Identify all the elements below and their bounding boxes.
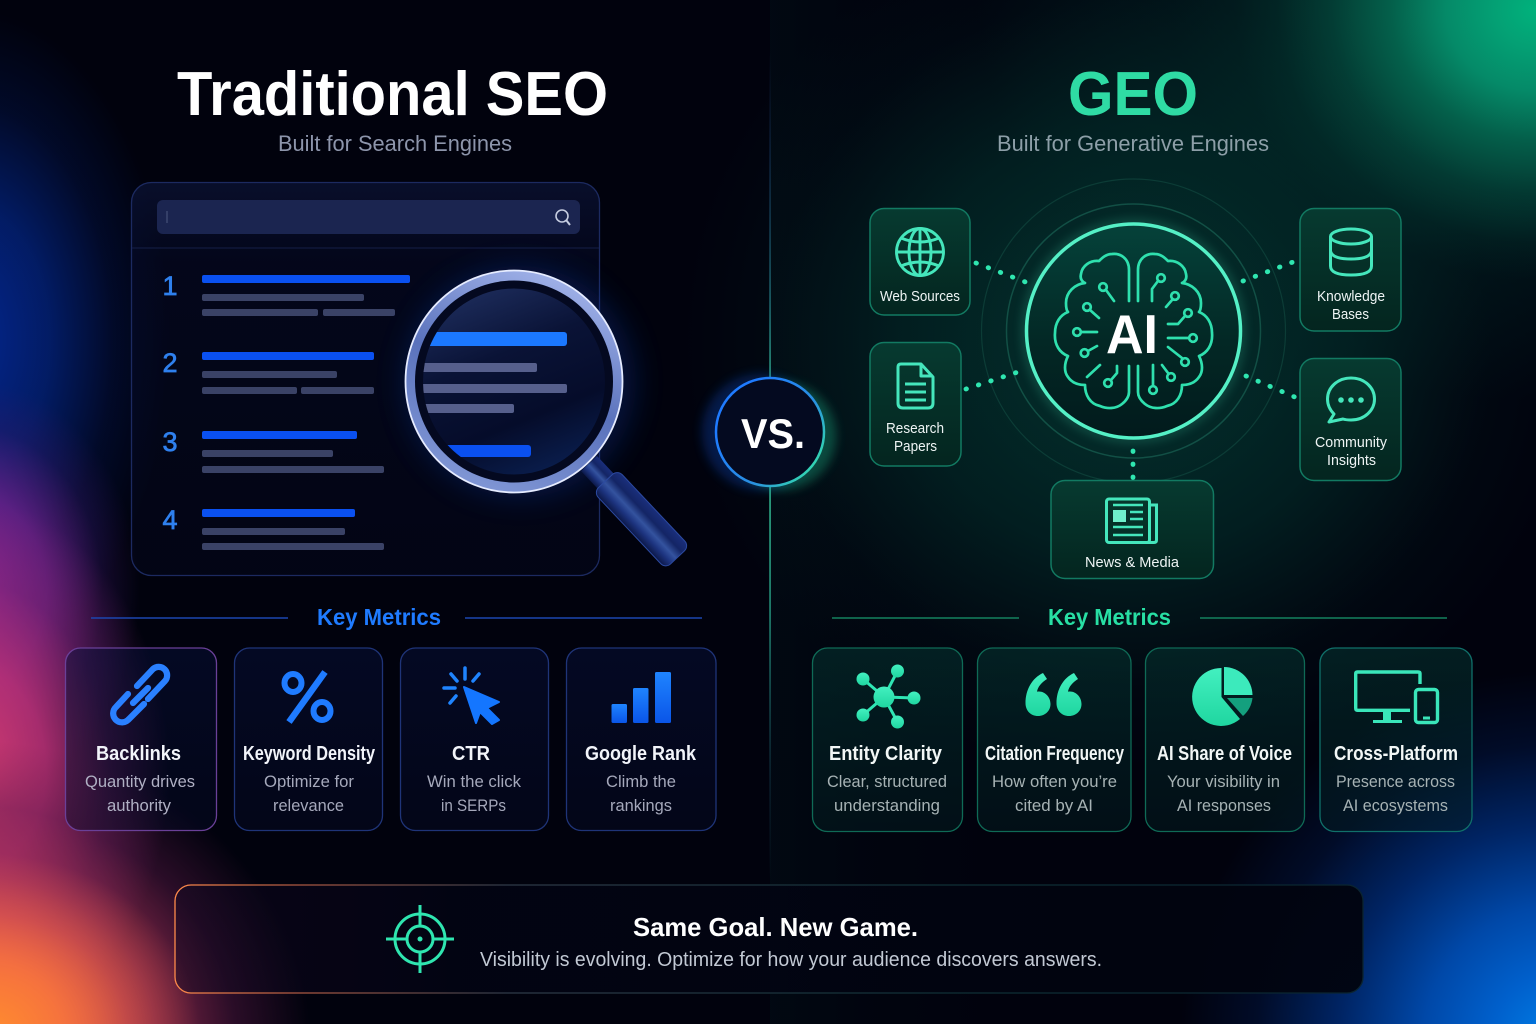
- metric card: CTR: CTR: [452, 743, 491, 765]
- metric card: Entity Clarity: Clear, structured: [827, 772, 947, 791]
- icon: document: [898, 364, 933, 408]
- metric card: Backlinks: authority: [107, 796, 171, 815]
- metric card: Google Rank: rankings: [610, 796, 672, 815]
- metric card: Keyword Density: Keyword Density: [243, 743, 376, 765]
- result 3: [162, 427, 384, 473]
- icon: percent: [284, 672, 330, 722]
- result 1: [162, 271, 410, 316]
- metric card: Cross-Platform: [1320, 648, 1472, 832]
- metric card: Citation Frequency: Citation Frequency: [985, 743, 1125, 765]
- source card: Research Papers: [870, 342, 961, 466]
- metric card: Backlinks: Backlinks: [96, 743, 181, 765]
- right half haze: [770, 0, 1536, 1024]
- metric card: CTR: [400, 648, 548, 830]
- banner heading: Same Goal. New Game.: [633, 912, 918, 942]
- metric card: Entity Clarity: [812, 648, 962, 832]
- metric card: Keyword Density: Optimize for: [264, 772, 354, 791]
- VS badge: [702, 374, 836, 490]
- metric card: Backlinks: Quantity drives: [85, 772, 195, 791]
- icon: chat bubble: [1328, 378, 1374, 422]
- AI hub: [982, 179, 1286, 483]
- metric card: Backlinks: [66, 648, 216, 830]
- AI label: AI: [1106, 303, 1158, 365]
- metric card: AI Share of Voice: AI responses: [1177, 796, 1271, 815]
- source card: Community Insights: [1300, 358, 1401, 480]
- metric card: Google Rank: Climb the: [606, 772, 676, 791]
- subtitle: search engines: Built for Search Engines: [278, 131, 512, 156]
- metric card: CTR: in SERPs: [441, 796, 506, 815]
- icon: target: [386, 905, 454, 973]
- VS badge: VS.: [741, 410, 805, 457]
- source card: Community Insights: Community: [1315, 435, 1388, 451]
- center divider: [769, 50, 771, 880]
- metric card: Entity Clarity: Entity Clarity: [829, 743, 943, 765]
- metric card: Cross-Platform: Cross-Platform: [1334, 743, 1458, 765]
- metric card: CTR: Win the click: [427, 772, 521, 791]
- icon: bar chart: [612, 672, 671, 723]
- metric card: AI Share of Voice: AI Share of Voice: [1157, 743, 1292, 765]
- icon: newspaper: [1106, 499, 1156, 542]
- banner text: Visibility is evolving. Optimize for how your audience discovers answers.: [480, 948, 1102, 971]
- source card: News & Media: [1051, 480, 1214, 578]
- metric card: Citation Frequency: cited by AI: [1015, 796, 1093, 815]
- heading: SEO key metrics: Key Metrics: [317, 604, 441, 630]
- subtitle: generative engines: Built for Generative Engines: [997, 131, 1269, 156]
- metric card: Cross-Platform: AI ecosystems: [1343, 796, 1448, 815]
- icon: entity network: [856, 664, 920, 728]
- metric card: AI Share of Voice: Your visibility in: [1167, 772, 1280, 791]
- metric card: Citation Frequency: [978, 648, 1131, 832]
- source card: Community Insights: Insights: [1327, 453, 1376, 469]
- metric card: Cross-Platform: Presence across: [1336, 772, 1455, 791]
- source card: Research Papers: Papers: [894, 439, 937, 455]
- icon: devices: [1356, 672, 1438, 722]
- icon: pie chart: [1192, 667, 1252, 726]
- title: Traditional SEO: Traditional SEO: [177, 60, 608, 129]
- result 2: [162, 348, 374, 394]
- source card: Knowledge Bases: Knowledge: [1317, 289, 1385, 305]
- metric card: Google Rank: [566, 648, 716, 830]
- metric card: AI Share of Voice: [1146, 648, 1304, 832]
- source card: Web Sources: Web Sources: [880, 289, 960, 305]
- title: GEO: GEO: [1068, 60, 1198, 129]
- source card: News & Media: News & Media: [1085, 555, 1180, 571]
- metric card: Keyword Density: [234, 648, 382, 830]
- result 1: 1: [162, 271, 178, 301]
- panel: search results browser: [132, 182, 600, 576]
- result 2: 2: [162, 348, 178, 378]
- icon: magnifying glass: [404, 266, 690, 569]
- search bar: [157, 200, 580, 234]
- icon: chain link: [113, 667, 167, 722]
- icon: quote marks: [1026, 673, 1082, 716]
- result 3: 3: [162, 427, 178, 457]
- source card: Knowledge Bases: [1300, 208, 1401, 331]
- source card: Web Sources: [870, 208, 970, 315]
- metric card: Keyword Density: relevance: [273, 796, 344, 815]
- metric card: Citation Frequency: How often you’re: [992, 772, 1117, 791]
- result 4: 4: [162, 505, 178, 535]
- icon: cursor click: [444, 668, 499, 724]
- metric card: Google Rank: Google Rank: [585, 743, 697, 765]
- source card: Research Papers: Research: [886, 421, 944, 437]
- metric card: Entity Clarity: understanding: [834, 796, 940, 815]
- connectors: dotted lines: [966, 262, 1297, 480]
- banner: same goal new game: [175, 885, 1363, 993]
- icon: globe: [896, 228, 944, 276]
- source card: Knowledge Bases: Bases: [1332, 307, 1369, 323]
- heading: GEO key metrics: Key Metrics: [1048, 604, 1171, 630]
- result 4: [162, 505, 384, 550]
- icon: database: [1330, 229, 1372, 275]
- icon: brain: [1055, 254, 1212, 408]
